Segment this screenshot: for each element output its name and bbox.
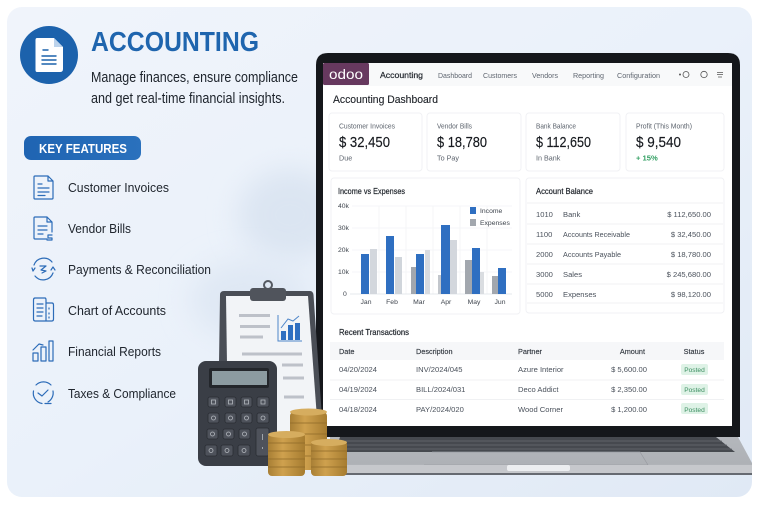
table: recent transactions: Amount <box>620 347 645 356</box>
row 3 <box>339 403 708 414</box>
navigation bar: Vendors <box>532 71 558 80</box>
rear coin stack <box>290 408 327 470</box>
feature: taxes and compliance <box>33 382 176 404</box>
left coin stack <box>268 431 305 476</box>
illustration: coin stacks <box>268 408 347 476</box>
stat card: bank balance: Bank Balance <box>536 122 576 130</box>
illustration: clipboard <box>218 281 323 432</box>
table: account balance: $ 112,650.00 <box>667 210 711 219</box>
stat card: vendor bills: To Pay <box>437 154 459 162</box>
title: ACCOUNTING <box>91 26 259 57</box>
chart: income vs expenses <box>331 178 520 314</box>
subtitle text <box>91 70 298 107</box>
laptop bezel <box>316 53 740 437</box>
row 1: Azure Interior <box>518 365 564 374</box>
feature: financial reports: Financial Reports <box>68 344 161 359</box>
stat card: vendor bills: $ 18,780 <box>437 135 487 151</box>
navigation bar: Configuration <box>617 71 660 80</box>
stat card: bank balance: $ 112,650 <box>536 135 591 151</box>
chart: income vs expenses: 40k <box>338 203 350 210</box>
table: recent transactions: Recent Transactions <box>339 327 409 337</box>
table: recent transactions: Partner <box>518 347 542 356</box>
table: recent transactions <box>330 327 724 414</box>
table: account balance: $ 18,780.00 <box>671 250 711 259</box>
feature: vendor bills <box>34 217 131 240</box>
stat card: profit: $ 9,540 <box>636 135 681 151</box>
table: account balance: 3000 <box>536 270 553 279</box>
row 2: 04/19/2024 <box>339 385 377 394</box>
table: recent transactions: Description <box>416 347 452 356</box>
stat card: profit <box>626 113 724 171</box>
navigation bar: Customers <box>483 71 517 80</box>
navigation bar: Reporting <box>573 71 604 80</box>
table: account balance: $ 32,450.00 <box>671 230 711 239</box>
navigation bar: Accounting <box>380 70 423 80</box>
chart: income vs expenses: Feb <box>386 299 398 306</box>
row 3: PAY/2024/020 <box>416 405 464 414</box>
table: account balance: Expenses <box>563 290 597 299</box>
laptop base <box>326 437 752 475</box>
table: account balance: $ 98,120.00 <box>671 290 711 299</box>
table: account balance: 1100 <box>536 230 552 239</box>
row 2: $ 2,350.00 <box>611 385 647 394</box>
table: account balance: Accounts Receivable <box>563 230 630 239</box>
chart: income vs expenses: 0 <box>343 291 347 298</box>
feature: payments and reconciliation <box>32 258 211 280</box>
row 1: $ 5,600.00 <box>611 365 647 374</box>
table: account balance <box>526 178 724 313</box>
stat card: bank balance <box>526 113 620 171</box>
table: account balance: Accounts Payable <box>563 250 621 259</box>
table: account balance: $ 245,680.00 <box>667 270 711 279</box>
chart: income vs expenses: 30k <box>338 225 350 232</box>
table: account balance: Sales <box>563 270 582 279</box>
feature: financial reports <box>33 341 161 361</box>
table: recent transactions: Status <box>684 347 705 356</box>
stat card: profit: Profit (This Month) <box>636 122 692 130</box>
chart: income vs expenses: Jan <box>361 299 372 306</box>
right coin stack <box>311 439 347 476</box>
feature: taxes and compliance: Taxes & Compliance <box>68 386 176 401</box>
feature: chart of accounts: Chart of Accounts <box>68 303 166 318</box>
table: account balance: Bank <box>563 210 581 219</box>
table: account balance: 5000 <box>536 290 553 299</box>
chart legend: Income <box>480 208 503 215</box>
navigation bar: Dashboard <box>438 71 472 80</box>
row 3: 04/18/2024 <box>339 405 377 414</box>
chart: income vs expenses: May <box>468 299 481 306</box>
feature: vendor bills: Vendor Bills <box>68 221 131 236</box>
navigation bar <box>323 63 732 86</box>
chart: income vs expenses: 20k <box>338 247 350 254</box>
row 3: Wood Corner <box>518 405 563 414</box>
key features heading: KEY FEATURES <box>39 141 127 156</box>
table: recent transactions: Date <box>339 347 354 356</box>
chart: income vs expenses: Mar <box>413 299 426 306</box>
row 2: BILL/2024/031 <box>416 385 465 394</box>
stat card: bank balance: In Bank <box>536 154 561 162</box>
subtitle text: and get real-time financial insights. <box>91 91 285 107</box>
chart: income vs expenses: 10k <box>338 269 350 276</box>
subtitle text: Manage finances, ensure compliance <box>91 70 298 86</box>
feature: chart of accounts <box>34 298 166 321</box>
icon: accounting document badge <box>20 26 78 84</box>
table: account balance: 2000 <box>536 250 553 259</box>
feature: payments and reconciliation: Payments & Reconciliation <box>68 262 211 277</box>
row 1: Posted <box>684 367 705 374</box>
stat card: customer invoices: Due <box>339 154 352 162</box>
feature: customer invoices <box>34 176 169 199</box>
stat card: customer invoices: $ 32,450 <box>339 135 390 151</box>
table: account balance: Account Balance <box>536 186 593 196</box>
chart: income vs expenses: Income vs Expenses <box>338 186 405 196</box>
chart legend: Expenses <box>480 220 510 227</box>
laptop <box>316 53 752 475</box>
stat card: customer invoices <box>329 113 422 171</box>
row 1: 04/20/2024 <box>339 365 377 374</box>
chart: income vs expenses: Apr <box>441 299 452 306</box>
dashboard heading: Accounting Dashboard <box>333 94 438 106</box>
stat card: vendor bills: Vendor Bills <box>437 122 472 130</box>
navigation bar: odoo <box>329 67 363 82</box>
row 2: Deco Addict <box>518 385 559 394</box>
laptop screen <box>323 63 732 426</box>
table: account balance: 1010 <box>536 210 553 219</box>
stat card: profit: + 15% <box>636 154 658 162</box>
illustration: calculator <box>198 361 277 466</box>
key features heading <box>24 136 141 160</box>
chart legend <box>470 207 510 227</box>
feature: customer invoices: Customer Invoices <box>68 180 169 195</box>
stat card: customer invoices: Customer Invoices <box>339 122 395 130</box>
feature list <box>32 176 211 404</box>
stat card: vendor bills <box>427 113 521 171</box>
chart: income vs expenses: Jun <box>495 299 506 306</box>
row 3: Posted <box>684 407 705 414</box>
row 2: Posted <box>684 387 705 394</box>
row 1 <box>339 364 708 375</box>
row 3: $ 1,200.00 <box>611 405 647 414</box>
row 1: INV/2024/045 <box>416 365 462 374</box>
row 2 <box>339 384 708 395</box>
